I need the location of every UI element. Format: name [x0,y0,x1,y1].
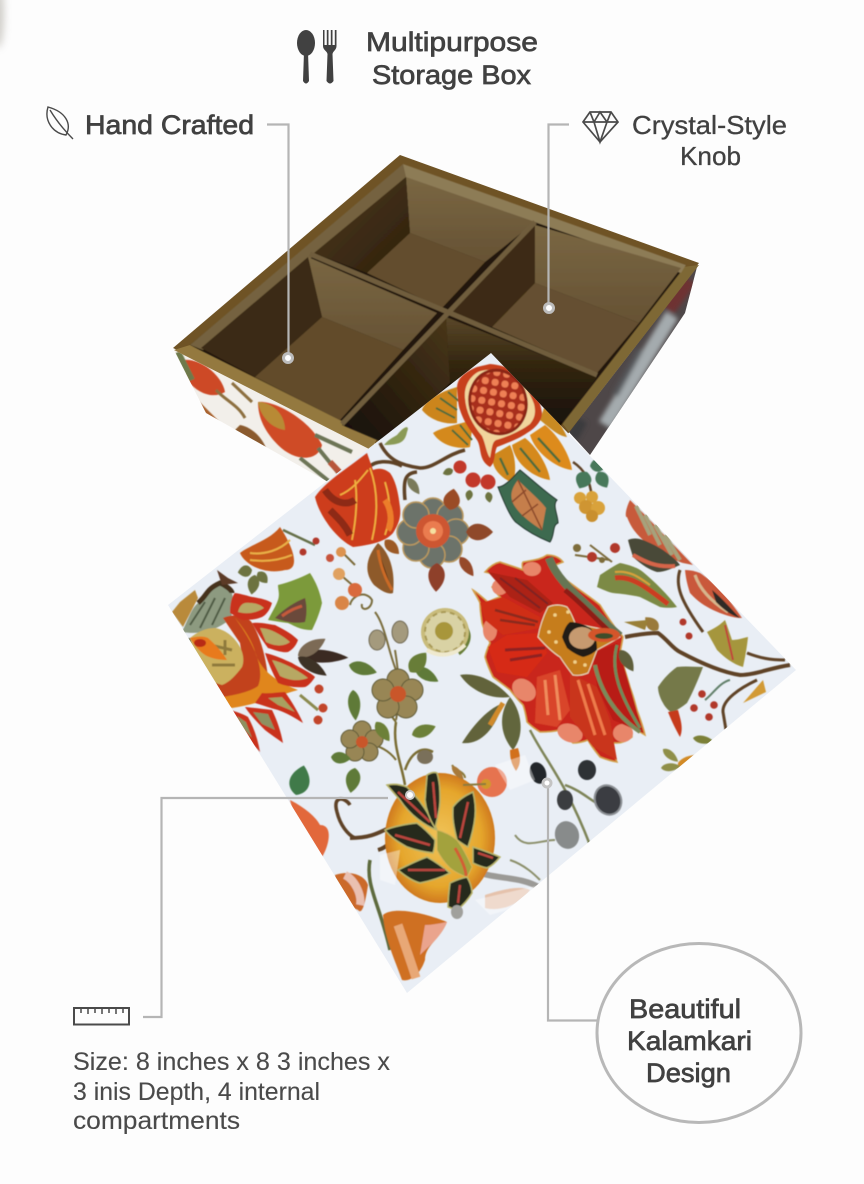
open wooden box [173,155,699,508]
icon: ruler [74,1008,129,1024]
upper band [549,558,620,636]
olive leaf [658,667,703,713]
velvet interior [190,164,686,501]
beige flowers and leaves [286,621,473,798]
box right side panel [569,267,697,455]
pink lobes [523,562,541,576]
callout circle: beautiful kalamkari design [597,944,801,1122]
green serrated leaf [498,470,558,542]
box left side panel [174,350,371,482]
lower petals [493,445,515,483]
buds [314,684,324,694]
icon: spoon and fork [297,30,336,84]
back compartment [314,177,535,308]
petals [488,572,553,613]
glossy reflections [380,755,540,915]
yellow leaf [707,620,748,667]
decorated lid [168,353,796,993]
pomegranate bloom [384,364,572,542]
label: crystal-style knob: Crystal-Style [632,110,787,140]
dark lotus flower [385,772,500,919]
upper right feather bloom and leaves [597,500,766,772]
left compartment [201,257,437,420]
small berry sprays [326,458,620,610]
dark berries [527,760,626,852]
compartment dividers [310,222,597,424]
bud tail [451,905,463,919]
coral flower and bud [450,764,507,797]
large red bloom [460,555,645,771]
text: size description: Size: 8 inches x 8 3 inches x [73,1048,390,1076]
crystal knob [421,608,469,656]
orange tulip [237,527,320,595]
paisley [190,628,243,685]
grey rosette flower [397,487,493,592]
heading: multipurpose storage box [366,27,538,90]
callout leader: crystal knob [544,124,569,312]
brown leaves [306,648,349,664]
label: crystal-style knob: Knob [680,141,741,171]
text: size description [73,1048,390,1135]
red leaf bloom [315,453,403,593]
branches [336,443,790,950]
lid surface [168,353,796,993]
left leaves [422,387,457,423]
bottom right fragments [677,754,694,768]
icon: leaf [47,107,73,139]
label: hand crafted: Hand Crafted [85,110,254,140]
red berries [454,460,466,474]
leaves [460,674,510,698]
corner smudge [0,0,4,48]
right petal band [593,643,643,733]
gold rim [173,155,699,508]
red body [215,615,268,697]
callout leader: hand crafted [267,124,292,362]
petals [230,593,272,620]
label: crystal-style knob [632,110,787,171]
callout leader: size [143,791,414,1017]
front compartment [342,317,597,470]
text: size description: 3 inis Depth, 4 internal [73,1078,320,1106]
callout circle: beautiful kalamkari design: Kalamkari [627,1026,752,1056]
right compartment [451,225,681,373]
callout leader: kalamkari design [543,779,597,1020]
center [538,605,620,675]
green leaf [268,573,322,630]
heading: multipurpose storage box: Storage Box [372,60,532,90]
icon: diamond [583,112,618,142]
left paisley bloom [172,570,349,752]
text: size description: compartments [73,1107,240,1135]
callout circle: beautiful kalamkari design: Beautiful [629,994,741,1024]
callout circle: beautiful kalamkari design: Design [646,1058,731,1088]
orange lower left flowers [290,800,530,980]
fruit [457,364,542,467]
heading: multipurpose storage box: Multipurpose [366,27,538,57]
